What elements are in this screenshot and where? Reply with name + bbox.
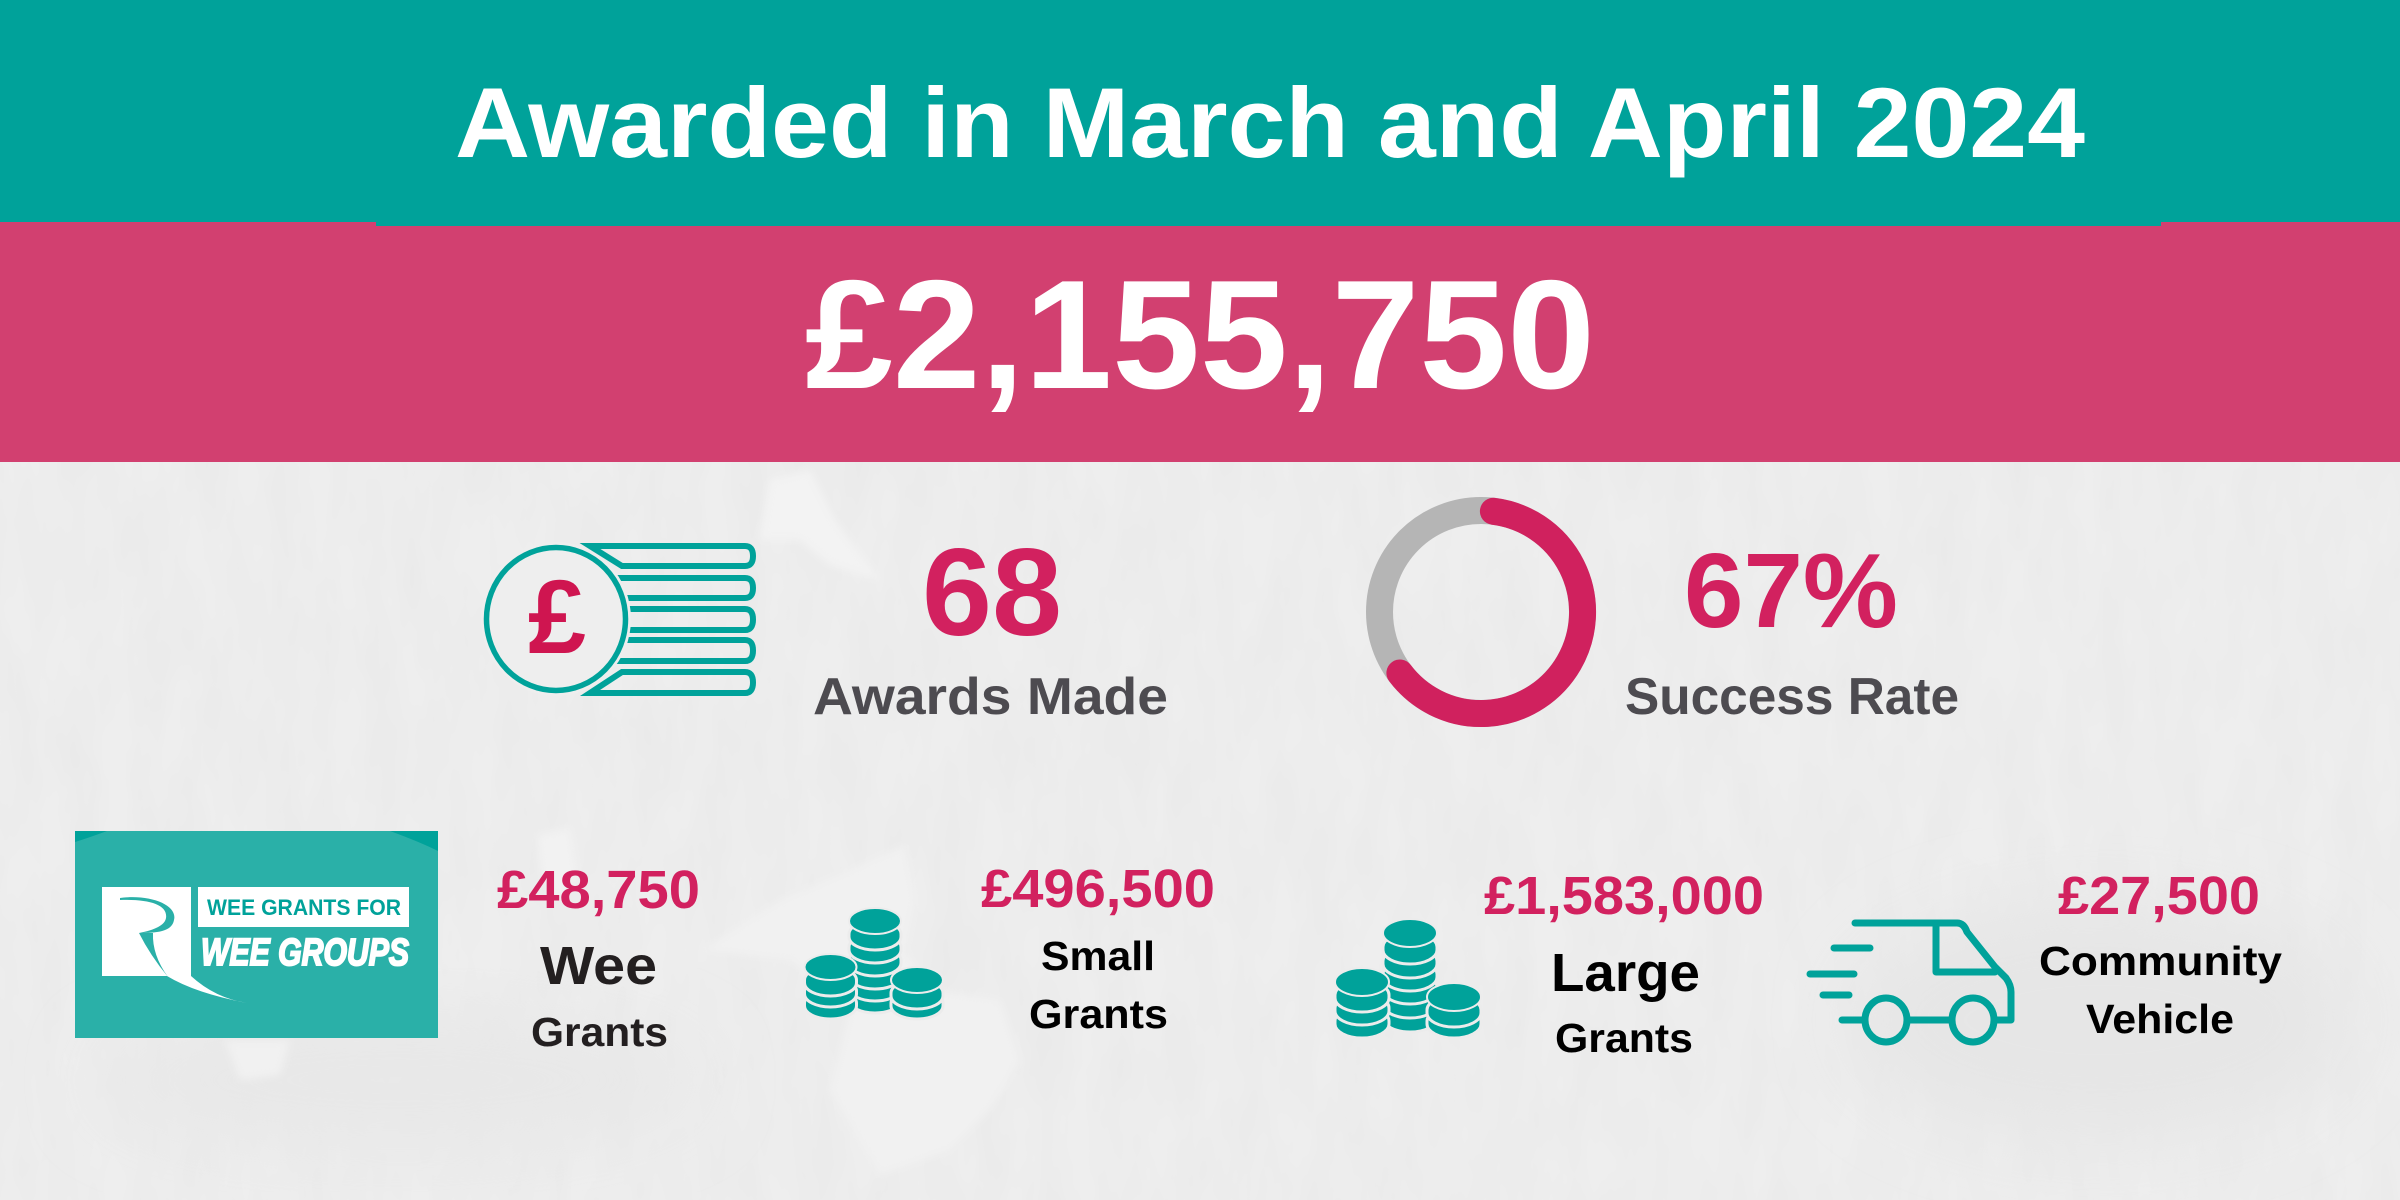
small grants figures: Small (1041, 933, 1155, 979)
large grants figures (1484, 866, 1764, 1061)
icon: delivery van (1810, 923, 2011, 1042)
community vehicle figures (2039, 866, 2282, 1042)
small grants figures: £496,500 (981, 859, 1215, 919)
wee grants figures: Grants (531, 1009, 668, 1055)
logo: wee grants for wee groups: WEE GROUPS (201, 932, 409, 974)
stat: awards made: Awards Made (813, 668, 1168, 726)
paper background (0, 462, 2400, 1200)
stat: success rate (1625, 532, 1959, 726)
total amount: £2,155,750 (805, 248, 1595, 421)
logo: wee grants for wee groups: WEE GRANTS FOR (207, 895, 401, 920)
wee grants figures (497, 860, 700, 1055)
title: Awarded in March and April 2024 (455, 67, 2085, 178)
large grants figures: Grants (1555, 1015, 1693, 1061)
wee grants figures: Wee (540, 936, 657, 996)
donut chart: 67% success rate (1380, 510, 1583, 714)
small grants figures (981, 859, 1215, 1037)
large grants figures: Large (1551, 943, 1700, 1003)
community vehicle figures: Vehicle (2086, 996, 2234, 1042)
small grants figures: Grants (1029, 991, 1168, 1037)
stat: success rate: Success Rate (1625, 668, 1959, 726)
teal title band (0, 0, 2400, 226)
wee grants figures: £48,750 (497, 860, 700, 920)
stat: awards made (813, 524, 1168, 726)
large grants figures: £1,583,000 (1484, 866, 1764, 926)
logo: wee grants for wee groups (75, 831, 438, 1038)
icon: pound coin with stack (481, 542, 753, 696)
stat: success rate: 67% (1684, 532, 1898, 650)
community vehicle figures: Community (2039, 938, 2282, 984)
icon: small grants coins (804, 908, 943, 1019)
pink total band (0, 222, 2400, 462)
icon: pound coin with stack: £ (528, 559, 586, 676)
icon: large grants coins (1335, 919, 1481, 1038)
community vehicle figures: £27,500 (2058, 866, 2260, 926)
stat: awards made: 68 (922, 524, 1062, 662)
